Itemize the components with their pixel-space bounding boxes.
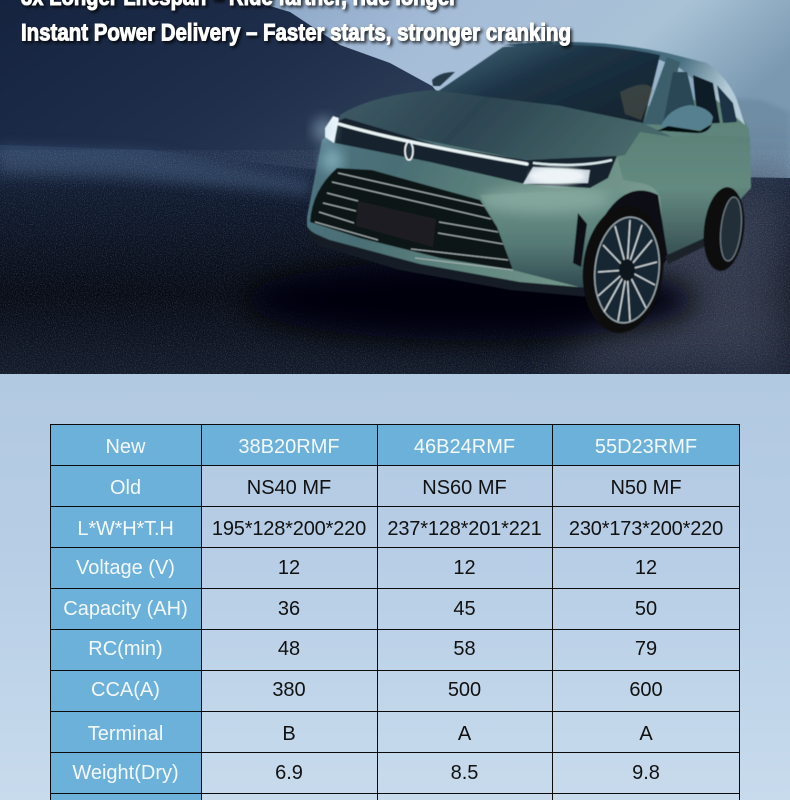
SUV: [307, 42, 751, 337]
front tyre: [577, 201, 669, 337]
row: Old: N50 MF: [610, 477, 682, 499]
gravel ground: [0, 145, 790, 374]
row: cold cranking amps: 500: [448, 678, 481, 700]
spokes: [598, 220, 657, 321]
sky: [0, 0, 790, 200]
side windows: [663, 72, 695, 123]
row: dimensions: 195*128*200*220: [212, 518, 366, 540]
lower lip: [307, 226, 590, 297]
row: Old: NS60 MF: [422, 477, 507, 499]
rear rim: [718, 196, 744, 262]
licence plate: [356, 201, 436, 247]
row: reserve capacity: RC(min): [88, 638, 163, 660]
distant mountain: [0, 0, 470, 190]
wheel arch: [590, 190, 668, 300]
row: capacity: [51, 589, 657, 629]
row: weight: 8.5: [451, 762, 478, 784]
far mirror: [432, 72, 455, 86]
row: cold cranking amps: 600: [629, 678, 663, 700]
right gravel tone: [560, 172, 790, 374]
row: dimensions: 237*128*201*221: [387, 518, 542, 540]
row: voltage: Voltage (V): [76, 556, 175, 578]
row: terminal: Terminal: [88, 723, 163, 745]
row: voltage: 12: [278, 556, 300, 578]
hero photo: SUV on gravel: [0, 0, 790, 374]
corner highlight: [321, 147, 343, 173]
row: dimensions: [51, 507, 723, 547]
grille slats: [315, 173, 513, 270]
row: weight: 6.9: [275, 762, 303, 784]
right hazy ridge: [725, 98, 790, 190]
row: weight: [51, 753, 660, 793]
row: cold cranking amps: 380: [272, 678, 306, 700]
black trim band: [335, 118, 617, 188]
hub: [619, 259, 635, 281]
specification table: [50, 424, 740, 800]
row: New: 38B20RMF: [238, 436, 340, 458]
interior seats: [620, 84, 653, 120]
row: Old: [51, 466, 682, 506]
side body: [590, 100, 751, 275]
left ground haze: [0, 145, 310, 196]
lower panel background: [0, 374, 790, 800]
row: capacity: 45: [453, 598, 476, 620]
row: Old: Old: [110, 477, 141, 499]
left headlight: [325, 116, 339, 143]
side vent: [573, 213, 587, 267]
badge: [405, 142, 413, 160]
left light glow: [313, 117, 335, 143]
hood: [340, 90, 672, 160]
sill: [665, 230, 722, 264]
row: Old: NS40 MF: [247, 477, 331, 499]
row: dimensions: L*W*H*T.H: [77, 518, 174, 540]
front fascia: [307, 123, 665, 288]
row: terminal: B: [282, 723, 296, 745]
row: terminal: A: [458, 723, 471, 745]
bumper right: [480, 190, 625, 288]
right headlight: [523, 167, 590, 184]
headline text: [21, 0, 571, 46]
row: capacity: 36: [278, 598, 300, 620]
roof: [503, 42, 745, 125]
row: New: [51, 425, 739, 465]
row: reserve capacity: 58: [453, 638, 476, 660]
row: weight: Weight(Dry): [72, 762, 179, 784]
row: terminal: [51, 712, 653, 752]
row: cut-off final row: [51, 794, 201, 800]
row: New: 55D23RMF: [595, 436, 697, 458]
row: reserve capacity: 79: [635, 638, 657, 660]
row: cold cranking amps: CCA(A): [91, 678, 160, 700]
row: weight: 9.8: [632, 762, 660, 784]
row: capacity: Capacity (AH): [63, 598, 188, 620]
car shadow: [245, 260, 695, 340]
bumper highlight: [480, 186, 610, 214]
door mirror: [660, 105, 713, 130]
row: reserve capacity: [51, 630, 657, 670]
row: dimensions: 230*173*200*220: [569, 518, 723, 540]
row: reserve capacity: 48: [278, 638, 300, 660]
windshield: [437, 45, 660, 124]
row: New: 46B24RMF: [414, 436, 515, 458]
grille: [310, 168, 513, 270]
row: voltage: 12: [453, 556, 476, 578]
rear tyre: [700, 185, 748, 273]
fender: [615, 132, 751, 258]
LED light bar: [339, 124, 527, 164]
headline text: Instant Power Delivery – Faster starts, stronger cranking: [21, 20, 571, 46]
row: voltage: 12: [635, 556, 657, 578]
side pillar: [643, 57, 680, 125]
row: cold cranking amps: [51, 671, 663, 711]
row: New: New: [105, 436, 146, 458]
row: voltage: [51, 548, 657, 588]
row: capacity: 50: [635, 598, 657, 620]
front rim: [590, 214, 664, 326]
row: terminal: A: [639, 723, 653, 745]
